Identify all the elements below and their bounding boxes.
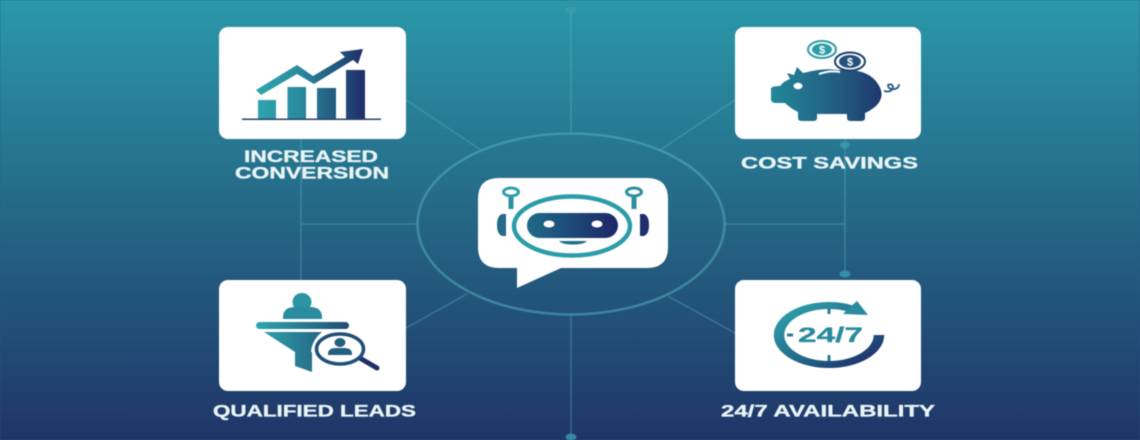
panel: qualified leads — [213, 280, 416, 420]
card — [219, 27, 406, 139]
label: QUALIFIED LEADS — [213, 402, 416, 420]
coin: navy: $ — [847, 56, 853, 68]
label — [235, 148, 389, 182]
bar chart icon — [242, 49, 381, 120]
piggy bank icon — [771, 41, 899, 121]
speech bubble — [478, 178, 668, 288]
funnel icon — [256, 293, 377, 372]
card — [219, 280, 406, 391]
clock icon: 24/7 — [798, 324, 863, 347]
icon: chatbot speech bubble — [478, 178, 668, 288]
coin: teal: $ — [819, 44, 825, 56]
label: 24/7 AVAILABILITY — [721, 402, 935, 420]
robot eyes — [544, 220, 602, 228]
label: COST SAVINGS — [741, 154, 918, 172]
panel: increased conversion — [219, 27, 406, 182]
robot smile — [559, 241, 587, 244]
robot face — [527, 213, 618, 238]
panel: cost savings — [735, 27, 921, 172]
label: CONVERSION — [235, 164, 389, 182]
clock icon — [779, 301, 879, 364]
card — [735, 27, 921, 139]
central hub ring — [418, 134, 724, 314]
magnifier — [316, 334, 377, 368]
label: INCREASED — [244, 148, 378, 166]
panel: 24/7 availability — [721, 280, 935, 420]
robot antennas — [504, 188, 642, 209]
card — [735, 280, 921, 391]
robot head ring — [514, 196, 630, 256]
robot ears — [497, 214, 649, 236]
